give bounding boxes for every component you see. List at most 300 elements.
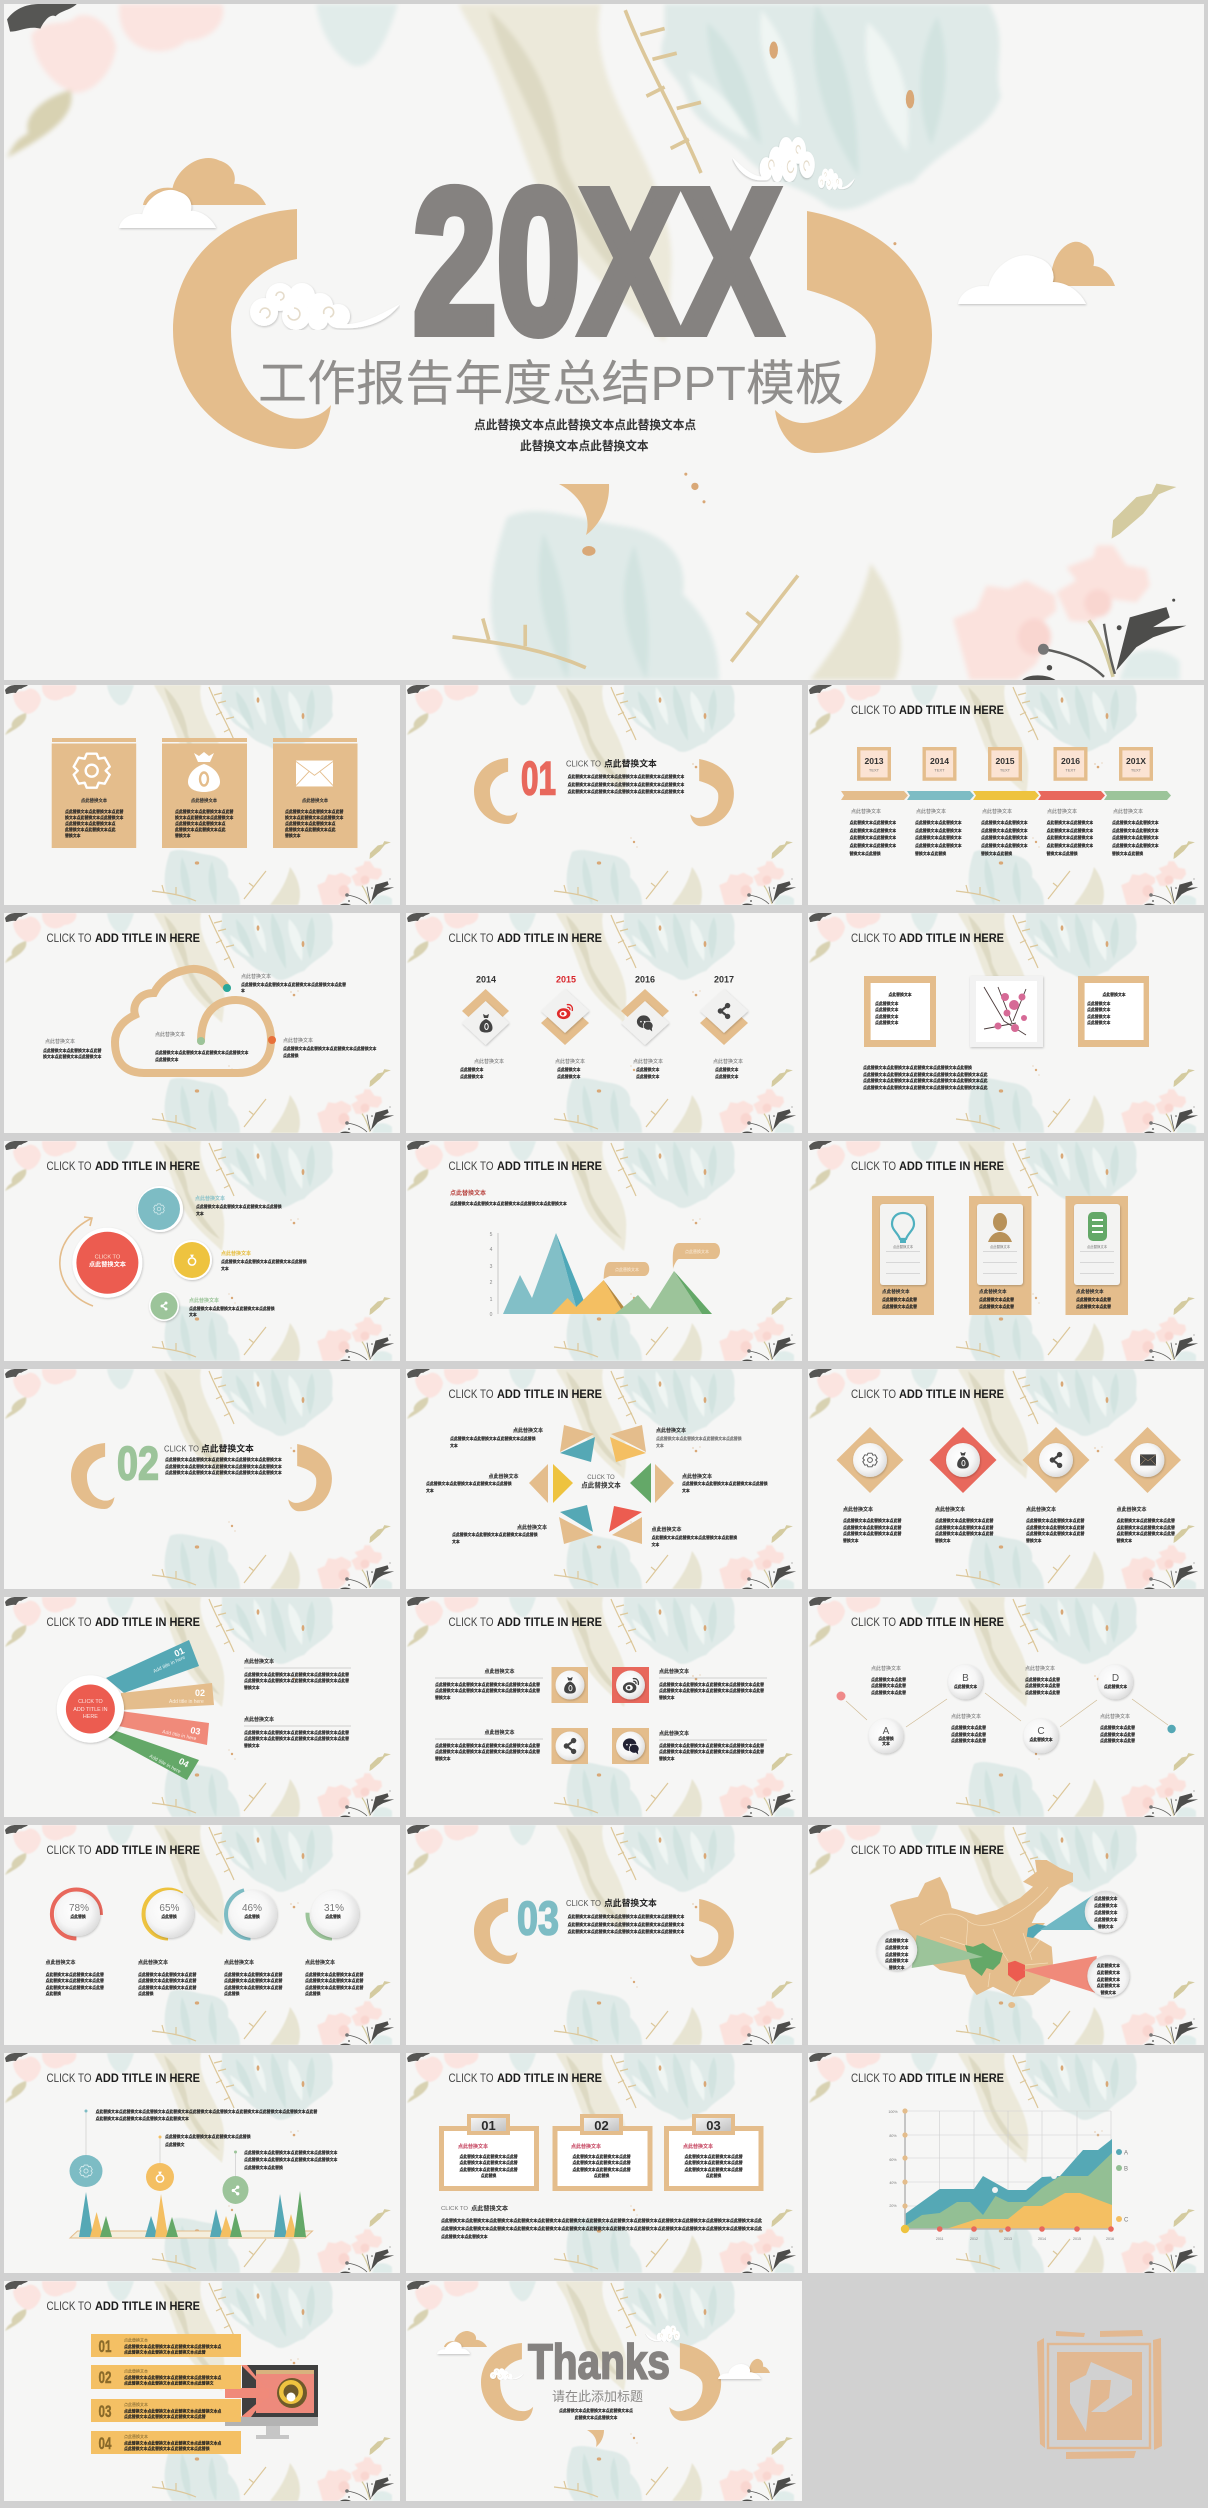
thanks heading: Thanks	[528, 2336, 670, 2390]
list row 03	[91, 2399, 241, 2422]
list row 01: 01	[98, 2337, 112, 2356]
slide: mountain chart	[406, 1141, 802, 1361]
slide title	[851, 933, 1004, 945]
slide title: ADD TITLE IN HERE	[95, 933, 200, 945]
card: bulb	[872, 1196, 934, 1315]
year boxes: 2016	[1061, 756, 1080, 766]
section text: 点此替换文本点此替换文本点此替换文本点此替换文本点此替换文本	[165, 1470, 282, 1475]
left frame: 点此替换文本	[888, 992, 912, 997]
callouts: 点此替换文本	[652, 1526, 682, 1533]
chart legend: A	[1124, 2150, 1128, 2156]
node captions: 点此替换文本点此替	[871, 1683, 906, 1688]
slide: circles process	[4, 1141, 400, 1361]
text top left: 点此替换文本点此替换文本点此替换文本点此替换文本点此替	[435, 1682, 540, 1687]
section heading: CLICK TO	[566, 758, 601, 768]
slide title	[851, 1161, 1004, 1173]
right frame: 点此替换文本	[1087, 1014, 1110, 1019]
slide title: CLICK TO	[448, 1617, 494, 1629]
card 03	[666, 2116, 761, 2188]
section brackets	[474, 758, 734, 826]
section number 01: 01	[521, 752, 556, 804]
callout center	[155, 1031, 248, 1062]
timeline column text: 点此替换文本	[1113, 808, 1143, 815]
text top left: 点此替换文本	[484, 1668, 515, 1675]
card: bulb: 点此替换文本	[882, 1288, 910, 1295]
slide: three tabbed cards	[406, 2053, 802, 2273]
blue text: 文本	[196, 1211, 204, 1216]
bubble one	[604, 1262, 649, 1279]
captions: 点此替换文本	[1116, 1506, 1147, 1513]
pin text: 点此替换文本点此替换文本点此替换文本点此替换	[165, 2134, 251, 2139]
bottom heading: CLICK TO	[441, 2206, 469, 2212]
section text: 点此替换文本点此替换文本点此替换文本点此替换文本点此替换文本	[568, 1922, 684, 1927]
pin text: 点此替换文本点此替换文本点此替换文本点此替换文本	[244, 2150, 337, 2155]
card 01: 点此替换文本点此替换文本点此替	[459, 2154, 518, 2159]
node captions: 点此替换文本点此替	[951, 1732, 986, 1737]
callout left: 换文本点此替换文本点此替换文本	[43, 1054, 101, 1059]
captions: 点此替换文本点此替换文本点此替	[1026, 1525, 1084, 1530]
green mountains	[615, 1271, 712, 1314]
slide title: ADD TITLE IN HERE	[899, 1845, 1004, 1857]
x axis labels: 2016	[1106, 2237, 1114, 2241]
slide title	[448, 2073, 602, 2085]
slide: four diamonds timeline	[406, 913, 802, 1133]
bar 02: 02	[195, 1688, 205, 1698]
callout right	[283, 1037, 376, 1058]
section heading: 点此替换文本	[201, 1442, 254, 1454]
card: person	[969, 1196, 1032, 1315]
captions: 点此替换文本点此替换文本点此替	[935, 1518, 993, 1523]
bottom heading	[441, 2204, 509, 2212]
callouts: 文本	[656, 1443, 664, 1448]
captions: 点此替换文本点此替换文本点此替	[1026, 1518, 1084, 1523]
right frame: 点此替换文本	[1087, 1020, 1110, 1025]
diamond captions: 点此替换文本	[555, 1058, 585, 1065]
text top right: 替换文本	[659, 1695, 675, 1700]
chart legend: C	[1124, 2218, 1129, 2224]
ring 78 percent	[52, 1890, 101, 1938]
callout circle left	[876, 1930, 917, 1970]
bar 02	[121, 1683, 214, 1710]
diamond pair 2016	[621, 989, 669, 1045]
cover slide	[4, 4, 1204, 680]
end dots	[836, 1692, 1176, 1733]
square bag	[552, 1667, 588, 1703]
captions: 点此替换文本点此替换文本点此替	[1116, 1525, 1175, 1530]
slide title: ADD TITLE IN HERE	[899, 2073, 1004, 2085]
y axis labels: 40%	[889, 2181, 897, 2185]
text bottom right	[659, 1730, 767, 1761]
slide title: ADD TITLE IN HERE	[95, 2301, 200, 2313]
callout circle right top: 点此替换文本	[1094, 1896, 1117, 1901]
ring 31 percent: 31%	[324, 1903, 344, 1914]
callouts: 点此替换文本	[517, 1524, 547, 1531]
callout top right: 点此替换文本	[241, 973, 271, 980]
bar 02: Add title in here	[169, 1699, 204, 1705]
node captions: 点此替换文本点此替	[1025, 1677, 1060, 1682]
slide: ABCD zigzag	[808, 1597, 1204, 1817]
green circle	[149, 1291, 179, 1321]
yellow text	[221, 1250, 307, 1271]
captions: 点此替换文本	[843, 1506, 873, 1513]
card three	[273, 738, 358, 848]
ring captions: 点此替换文本	[305, 1959, 335, 1966]
arrow band	[841, 791, 1171, 800]
card 01: 点此替换文本点此替换文本点此替	[459, 2167, 518, 2172]
node C	[1024, 1718, 1058, 1754]
text block two: 点此替换文本点此替换文本点此替换文本点此替换文本点此替	[244, 1736, 349, 1741]
node A: 点此替换	[878, 1736, 894, 1741]
center text: 点此替换文本	[581, 1480, 621, 1490]
card three: 点此替换文本点此替换文本点此替	[285, 809, 343, 814]
blue text: 点此替换文本点此替换文本点此替换文本点此替换	[196, 1204, 282, 1209]
year labels: 2014	[476, 974, 496, 984]
slide: map	[808, 1825, 1204, 2045]
center circle	[57, 1675, 124, 1743]
ring 78 percent: 78%	[69, 1903, 89, 1914]
year labels: 2016	[635, 974, 655, 984]
node captions: 点此替换文本点此替	[951, 1738, 986, 1743]
diamond captions	[460, 1058, 743, 1079]
x axis labels: 2013	[1004, 2237, 1012, 2241]
bar 04	[106, 1728, 199, 1780]
slide title: ADD TITLE IN HERE	[497, 933, 602, 945]
yellow mountains	[552, 1280, 629, 1314]
slide title	[46, 1161, 200, 1173]
captions: 替换文本	[843, 1538, 859, 1543]
slide title: CLICK TO	[851, 1617, 896, 1629]
callouts: 点此替换文本	[682, 1473, 712, 1480]
slide title: ADD TITLE IN HERE	[899, 705, 1004, 717]
tan cloud right	[1032, 242, 1115, 286]
center photo	[970, 976, 1043, 1047]
card 02: 点此替换	[594, 2173, 609, 2178]
bottom text: 点此替换文本点此替换文本点此替换文本点此替换文本点此替换	[863, 1065, 972, 1070]
text bottom right: 点此替换文本	[659, 1730, 689, 1737]
center text	[581, 1475, 621, 1490]
yellow text: 点此替换文本点此替换文本点此替换文本点此替换	[221, 1259, 307, 1264]
year boxes: TEXT	[1065, 768, 1076, 772]
spike groups	[79, 2191, 306, 2237]
y axis labels	[888, 2110, 898, 2208]
square share	[552, 1728, 588, 1764]
captions: 点此替换文本	[1026, 1506, 1056, 1513]
callouts: 文本	[652, 1542, 659, 1547]
callout circle right bottom: 替换文本	[1101, 1990, 1116, 1995]
list row 02: 点此替换文本	[124, 2368, 148, 2374]
text bottom left: 点此替换文本点此替换文本点此替换文本点此替换文本点此替	[435, 1743, 540, 1748]
slide title	[46, 1617, 200, 1629]
description line two: 此替换文本点此替换文本	[520, 439, 649, 453]
ring captions: 点此替换文本点此替换文本点此替	[224, 1978, 282, 1983]
node B	[948, 1664, 983, 1700]
card 01: 点此替换文本点此替换文本点此替	[459, 2160, 518, 2165]
diamond captions: 点此替换文本	[715, 1074, 738, 1079]
callouts: 文本	[682, 1488, 690, 1493]
timeline column text: 点此替换文本点此替换文本	[981, 835, 1028, 840]
card one: 点此替换文本点此替换文本点此替	[65, 809, 123, 814]
list row 04: 04	[98, 2434, 112, 2453]
timeline column text: 点此替换文本点此替换文本	[915, 835, 962, 840]
ring captions: 点此替换文本点此替换文本点此替	[46, 1972, 104, 1977]
text bottom right: 点此替换文本点此替换文本点此替换文本点此替换文本点此替	[659, 1743, 764, 1748]
thanks subtitle: 请在此添加标题	[552, 2389, 643, 2404]
card 03: 点此替换	[706, 2173, 721, 2178]
year boxes: 201X	[1126, 756, 1146, 766]
card: chat: 点此替换文本点此替	[1076, 1304, 1111, 1309]
chart axis: 2	[490, 1280, 493, 1286]
callout right: 点此替换	[283, 1053, 299, 1058]
callout circle left: 点此替换文本	[885, 1945, 908, 1950]
timeline column text	[850, 808, 1159, 856]
chart grid	[905, 2111, 1111, 2229]
card 02: 点此替换文本点此替换文本点此替	[572, 2167, 631, 2172]
card: chat: 点此替换文本	[1087, 1244, 1108, 1249]
pin teal	[70, 2110, 102, 2187]
bottom tan crescent	[559, 484, 609, 535]
card 03: 点此替换文本点此替换文本点此替	[684, 2167, 743, 2172]
callouts: 点此替换文本点此替换文本点此替换文本点此替换	[656, 1436, 742, 1441]
year boxes: TEXT	[1000, 768, 1011, 772]
diamond captions: 点此替换文本	[633, 1058, 663, 1065]
year labels: 2017	[714, 974, 734, 984]
section heading: CLICK TO	[164, 1444, 199, 1454]
pin text: 点此替换文本点此替换文本点此替换文本点此替换文本	[244, 2157, 337, 2162]
center text: CLICK TO	[587, 1475, 615, 1481]
captions: 点此替换文本点此替换文本点此替	[935, 1531, 993, 1536]
timeline column text: 点此替换文本点此替换文本	[915, 820, 962, 825]
ring captions: 点此替换文本点此替换文本点此替	[224, 1972, 282, 1977]
slide title	[851, 1617, 1004, 1629]
decorative auspicious cloud left	[250, 283, 400, 330]
slide title: ADD TITLE IN HERE	[899, 1389, 1004, 1401]
callouts: 点此替换文本点此替换文本点此替换文本点此替换	[682, 1481, 768, 1486]
card two	[162, 738, 247, 848]
card two: 点此替换文本点此替换文本点此替	[175, 809, 233, 814]
bottom text: 点此替换文本点此替换文本点此替换文本点此替换文本点此替换文本点此	[863, 1085, 988, 1090]
year boxes: 2013	[864, 756, 884, 766]
card two: 换文本点此替换文本点此替换文本	[175, 815, 233, 820]
callout circle right top: 点此替换文本	[1094, 1910, 1117, 1915]
bubble one: 点此替换文本	[615, 1266, 639, 1272]
ring captions: 点此替换文本点此替换文本点此替	[305, 1978, 363, 1983]
card two: 替换文本	[175, 833, 191, 838]
ring captions: 点此替换文本点此替换文本点此替	[305, 1972, 363, 1977]
section number 02: 02	[117, 1436, 159, 1490]
node D: 点此替换文本	[1104, 1684, 1127, 1689]
ring captions: 点此替换	[46, 1991, 61, 1996]
timeline column text: 替换文本点此替换	[1046, 851, 1078, 856]
axis markers	[901, 2108, 1114, 2233]
ring captions: 点此替换文本	[224, 1959, 254, 1966]
yellow circle	[172, 1240, 212, 1280]
white cloud left	[119, 190, 216, 228]
slide title	[46, 2073, 200, 2085]
diamond pair 2014	[462, 989, 509, 1045]
card: chat: 点此替换文本	[1076, 1288, 1104, 1295]
year labels: 2015	[556, 974, 576, 984]
slide: fan bars	[4, 1597, 400, 1817]
bottom text: 点此替换文本点此替换文本点此替换文本点此替换文本点此替换文本点此	[863, 1072, 988, 1077]
beam teal	[1040, 1895, 1095, 1930]
list row 02: 点此替换文本点此替换文本点此替换文本点此替换文本点	[124, 2375, 221, 2380]
slide title: CLICK TO	[448, 1389, 494, 1401]
list row 04	[91, 2431, 241, 2454]
main red circle: 点此替换文本	[89, 1260, 127, 1268]
list row 02	[91, 2365, 241, 2389]
node captions: 点此替换文本点此替	[1100, 1738, 1135, 1743]
ring captions: 点此替换文本点此替换文本点此替	[46, 1985, 104, 1990]
ring captions: 点此替换文本点此替换文本点此替	[46, 1978, 104, 1983]
bottom text	[863, 1065, 988, 1090]
node captions: 点此替换文本	[951, 1713, 981, 1720]
timeline column text: 点此替换文本	[1047, 808, 1077, 815]
callout circle right bottom: 点此替换文本	[1097, 1970, 1120, 1975]
slide title	[46, 933, 200, 945]
yellow text: 文本	[221, 1266, 229, 1271]
year boxes: TEXT	[869, 768, 880, 772]
bottom text: 点此替换文本点此替换文本点此替换文本点此替换文本点此替换文本点此	[863, 1078, 988, 1083]
left frame: 点此替换文本	[875, 1020, 898, 1025]
timeline column text: 点此替换文本点此替换文本	[850, 835, 896, 840]
slide: thanks	[406, 2281, 802, 2501]
node captions	[871, 1665, 1135, 1743]
diamond bag	[930, 1427, 996, 1493]
list row 03: 点此替换文本点此替换文本点此替换文本点此替	[124, 2414, 206, 2419]
left frame: 点此替换文本	[875, 1007, 898, 1012]
x axis labels: 2014	[1038, 2237, 1046, 2241]
captions: 点此替换文本点此替换文本点此替	[1116, 1531, 1175, 1536]
pin text: 点此替换文本点此替换文本点此替换文本点此替换文本点此替换文本点此替换文本点此替换文本点此替换文本点此替换文本点此替	[96, 2109, 317, 2114]
section text: 点此替换文本点此替换文本点此替换文本点此替换文本点此替换文本	[568, 789, 684, 794]
slide title: CLICK TO	[851, 1389, 896, 1401]
text bottom left: 点此替换文本点此替换文本点此替换文本点此替换文本点此替	[435, 1749, 540, 1754]
square chat	[612, 1728, 649, 1764]
center circle: ADD TITLE IN	[73, 1707, 108, 1713]
callout left	[43, 1038, 101, 1059]
card 01: 01	[481, 2118, 496, 2133]
ring captions: 点此替换文本	[138, 1959, 168, 1966]
right frame: 点此替换文本	[1087, 1007, 1110, 1012]
bar 01: Add title in here	[152, 1655, 187, 1675]
chart heading: 点此替换文本	[450, 1189, 486, 1197]
list row 01: 点此替换文本点此替换文本点此替换文本点此替换文本点	[124, 2344, 221, 2349]
slide title: CLICK TO	[448, 1161, 494, 1173]
section text: 点此替换文本点此替换文本点此替换文本点此替换文本点此替换文本	[568, 782, 684, 787]
callout right: 点此替换文本	[283, 1037, 313, 1044]
slide title	[851, 2073, 1004, 2085]
beam green	[912, 1935, 983, 1968]
y axis labels: 80%	[889, 2134, 897, 2138]
section text	[568, 774, 684, 794]
card two: 点此替换文本点此替换文本点	[175, 821, 226, 826]
slide title: ADD TITLE IN HERE	[899, 1617, 1004, 1629]
x axis labels: 2015	[1073, 2237, 1081, 2241]
card 02: 点此替换文本点此替换文本点此替	[572, 2160, 631, 2165]
y axis labels: 100%	[888, 2110, 898, 2114]
slide title: CLICK TO	[46, 1845, 92, 1857]
x axis labels: 2011	[936, 2237, 944, 2241]
slide title: ADD TITLE IN HERE	[497, 2073, 602, 2085]
node B: 点此替换文本	[954, 1684, 977, 1689]
bar 03: Add title in here	[162, 1729, 197, 1742]
section heading: 点此替换文本	[604, 758, 657, 768]
diamond captions: 点此替换文本	[557, 1067, 580, 1072]
slide title: CLICK TO	[448, 2073, 494, 2085]
text block two: 点此替换文本点此替换文本点此替换文本点此替换文本点此替	[244, 1730, 349, 1735]
card one	[52, 738, 136, 848]
slide title: CLICK TO	[851, 705, 896, 717]
bar 04: Add title in here	[148, 1753, 182, 1775]
timeline column text: 点此替换文本点此替换文本	[850, 828, 896, 833]
callout circle left: 点此替换文本	[885, 1952, 908, 1957]
slide title	[448, 1617, 602, 1629]
year boxes: TEXT	[1131, 768, 1142, 772]
card one: 点此替换文本	[81, 797, 108, 804]
ring 78 percent: 点此替换	[70, 1914, 86, 1919]
card 01: 点此替换	[481, 2173, 496, 2178]
section heading	[164, 1442, 254, 1454]
timeline column text: 点此替换文本点此替换文本	[1046, 828, 1093, 833]
main red circle: CLICK TO	[95, 1254, 121, 1260]
slide title: CLICK TO	[851, 1845, 896, 1857]
blue circle	[137, 1186, 183, 1232]
slide: four diamonds with discs	[808, 1369, 1204, 1589]
slide: list with monitor	[4, 2281, 400, 2501]
slide title: CLICK TO	[46, 2073, 92, 2085]
slide title: CLICK TO	[851, 933, 896, 945]
node captions: 点此替换文本点此替	[1025, 1690, 1060, 1695]
callouts: 文本	[452, 1539, 460, 1544]
ring captions: 点此替换	[224, 1991, 240, 1996]
left frame: 点此替换文本	[875, 1014, 898, 1019]
monitor illustration	[225, 2365, 318, 2439]
card: chat: 点此替换文本点此替	[1076, 1297, 1111, 1302]
list row 01: 点此替换文本点此替换文本点此替换文本点此替	[124, 2350, 206, 2354]
card: person: 点此替换文本点此替	[979, 1304, 1014, 1309]
text top right: 点此替换文本点此替换文本点此替换文本点此替换文本点此替	[659, 1688, 764, 1693]
area series B	[905, 2153, 1112, 2229]
timeline column text: 替换文本点此替换	[1112, 851, 1143, 856]
callouts: 点此替换文本	[656, 1427, 686, 1434]
section heading: CLICK TO	[566, 1898, 601, 1908]
card three: 点此替换文本	[302, 797, 329, 804]
chart legend	[1116, 2149, 1129, 2224]
card 02: 点此替换文本	[571, 2143, 601, 2150]
bottom text: 点此替换文本点此替换文本点此替换文本点此替换文本点此替换文本点此替换文本点此替换文本点此替换文本点此替换文本点此替换文本点此替换文本点此替换文本点此替换文本点此	[441, 2226, 762, 2231]
slide: picture frames	[808, 913, 1204, 1133]
center circle: HERE	[83, 1714, 98, 1720]
beam red	[1023, 1956, 1097, 1993]
slide: section 03	[406, 1825, 802, 2045]
card three: 此替换文本点此替换文本点此	[285, 827, 336, 832]
section text: 点此替换文本点此替换文本点此替换文本点此替换文本点此替换文本	[165, 1457, 282, 1462]
text bottom left: 点此替换文本	[484, 1729, 515, 1736]
pin text: 点此替换文	[165, 2142, 185, 2147]
callout circle right bottom: 点此替换文本	[1097, 1977, 1120, 1982]
green text: 点此替换文本点此替换文本点此替换文本点此替换	[189, 1306, 275, 1311]
list row 04: 点此替换文本点此替换文本点此替换文本点此替换	[124, 2446, 210, 2451]
decorative auspicious cloud right	[732, 137, 855, 190]
diamond captions: 点此替换文本	[636, 1074, 659, 1079]
ring captions: 点此替换文本点此替换文本点此替	[224, 1985, 282, 1990]
diamond captions: 点此替换文本	[636, 1067, 659, 1072]
year labels	[476, 974, 734, 984]
bottom text	[441, 2218, 762, 2239]
slide title: CLICK TO	[851, 2073, 896, 2085]
slide title: ADD TITLE IN HERE	[95, 1845, 200, 1857]
section brackets	[71, 1443, 332, 1511]
